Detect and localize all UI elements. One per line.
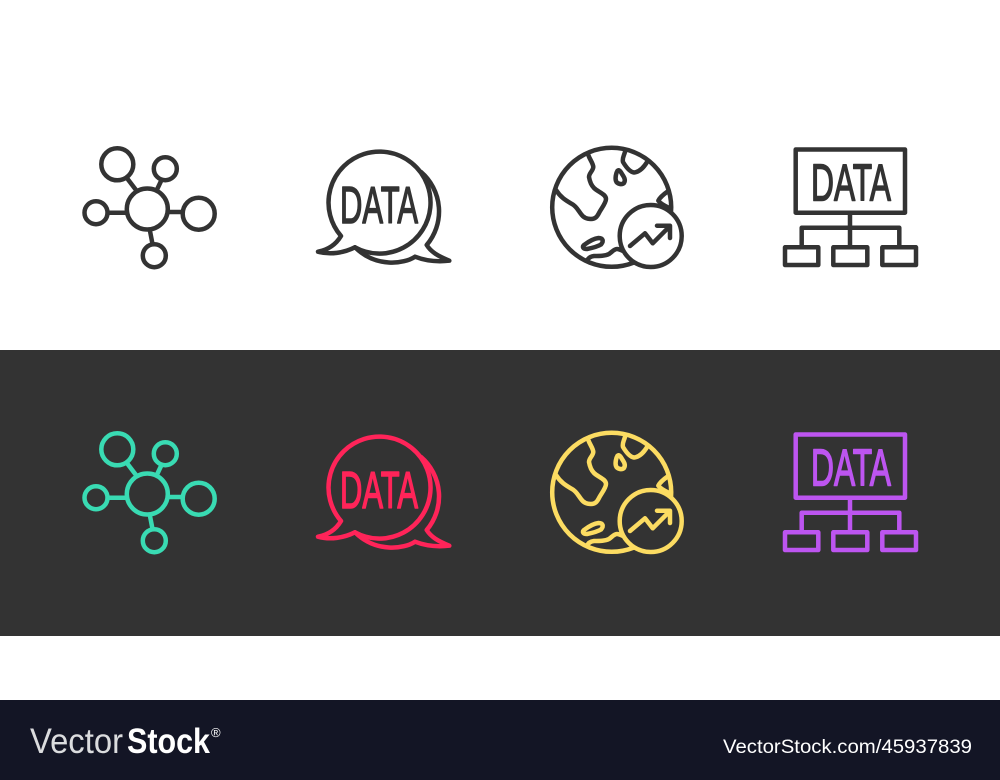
icon: purple DATA hierarchy on dark: DATA (811, 440, 891, 498)
icon: yellow globe with growth chart on dark (552, 433, 682, 552)
icon: teal hub network on dark (84, 433, 215, 552)
icon: dark globe with growth chart on white (552, 148, 682, 267)
footer logo: VectorStock: ® (211, 725, 221, 740)
icon: dark DATA hierarchy on white: DATA (811, 154, 891, 212)
footer image id: VectorStock.com/45937839 (723, 736, 972, 758)
footer logo: VectorStock (30, 722, 221, 761)
footer logo: VectorStock: Stock (127, 722, 210, 761)
icon: purple DATA hierarchy on dark (785, 434, 916, 550)
icon: dark hub network on white (84, 148, 215, 267)
panel: footer bar (0, 700, 1000, 780)
icon: dark DATA hierarchy on white (785, 150, 916, 265)
panel: dark icon row background (0, 350, 1000, 636)
icon: red DATA speech bubbles on dark: DATA (340, 462, 418, 520)
icon: dark DATA speech bubbles on white (318, 152, 449, 263)
icon: red DATA speech bubbles on dark (318, 437, 449, 548)
icon: dark DATA speech bubbles on white: DATA (340, 177, 418, 235)
footer logo: VectorStock: Vector (30, 722, 123, 761)
